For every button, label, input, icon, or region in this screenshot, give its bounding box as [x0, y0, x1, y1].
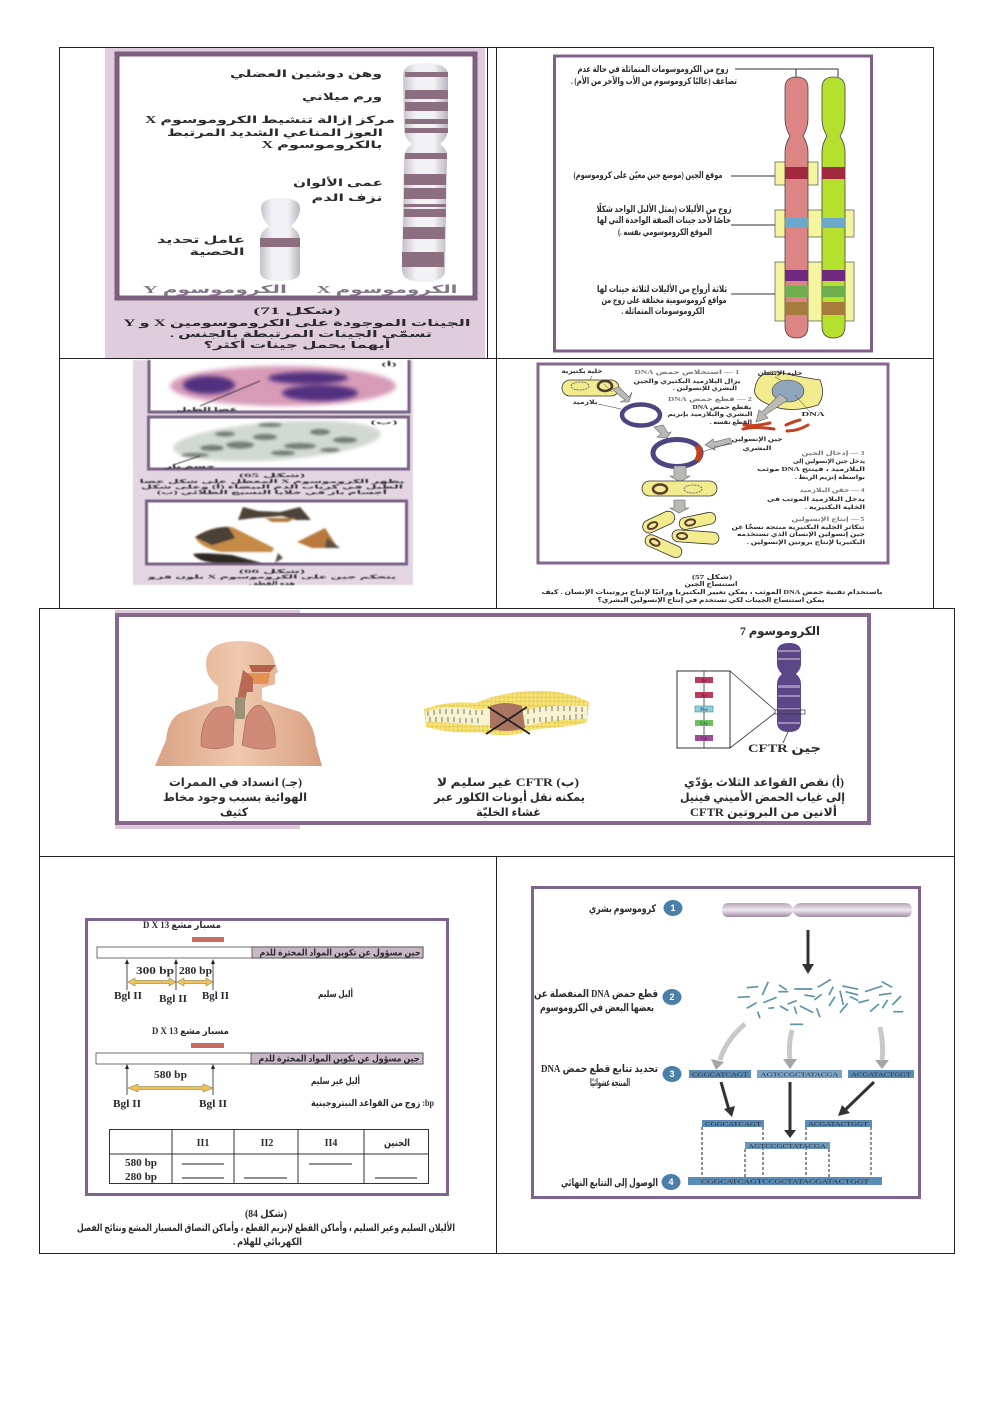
amino acid callout: Ile — [701, 694, 707, 699]
X chromosome gene labels: نزف الدم — [312, 193, 382, 204]
gel results table: II4 — [325, 1138, 337, 1149]
caption figure 66 — [146, 568, 396, 587]
dividing bacteria — [641, 509, 719, 560]
cloning steps: يقطع حمض DNA — [692, 404, 752, 411]
X chromosome gene labels: وهن دوشين العضلي — [230, 69, 382, 80]
amino acid callout: Val — [701, 737, 708, 742]
CFTR gene label: جين CFTR — [748, 741, 821, 755]
chromosome labels: ثلاثة أزواج من الأليلات لثلاثة جينات لها — [597, 283, 727, 295]
bacterium with recombinant plasmid — [642, 481, 717, 496]
abnormal allele diagram: Bgl II — [113, 1099, 141, 1110]
step labels: كروموسوم بشري — [589, 904, 657, 915]
CFTR gene label — [748, 732, 821, 755]
gel results table: II1 — [197, 1138, 209, 1149]
chromosome labels: الموقع الكروموسومي نفسه .) — [618, 227, 712, 238]
yellow gene boxes — [775, 162, 854, 321]
normal allele diagram: أليل سليم — [318, 987, 353, 1000]
caption figure 71: تسمّى الجينات المرتبطة بالجنس . — [170, 330, 432, 340]
normal allele diagram: Bgl II — [114, 991, 142, 1002]
chromosome labels: موقع الجين (موضع جين معيّن على كروموسوم) — [574, 170, 722, 181]
caption figure 71: (شكل 71) — [254, 306, 340, 317]
caption figure 66: يتحكم جين على الكروموسوم X بلون فرو — [146, 574, 396, 580]
diagram labels: خلية بكتيرية — [562, 368, 602, 375]
cloning steps: بواسطة إنزيم الربط . — [795, 474, 865, 481]
diagram labels — [562, 368, 825, 452]
cloning steps: تتكاثر الخلية البكتيرية منتجة نسخًا عن — [732, 523, 864, 531]
diagram labels: جين الإنسولين — [732, 436, 782, 443]
chromosome names: الكروموسوم X — [317, 284, 458, 296]
X chromosome gene labels: عمى الألوان — [293, 176, 383, 189]
step numbers — [668, 903, 676, 1187]
caption figure 84: الأليلان السليم وغير السليم ، وأماكن القطع لإنزيم القطع ، وأماكن التصاق المسبار المشع ونتائج الفصل — [77, 1221, 455, 1234]
aligned fragments — [688, 1120, 882, 1186]
caption figure 71: الجينات الموجودة على الكروموسومين X و Y — [124, 318, 471, 329]
chromosome Y — [260, 198, 300, 281]
box B: Barr body: جسم بار — [163, 464, 215, 470]
gel results table: II2 — [261, 1138, 273, 1149]
panel: Barr body and calico cat — [133, 360, 413, 587]
caption figure 71 — [124, 306, 471, 351]
cloning steps: جين إنسولين الإنسان الذي تستخدمه — [737, 531, 865, 538]
normal allele diagram: Bgl II — [159, 994, 187, 1005]
caption figure 57: يمكن استنساخ الجينات لكي تستخدم في إنتاج الإنسولين البشري؟ — [598, 597, 824, 604]
X chromosome gene labels: مركز إزالة تنشيط الكروموسوم X — [145, 115, 395, 126]
leader lines — [731, 69, 838, 294]
caption figure 57: باستخدام تقنية حمض DNA الموثب ، يمكن تغيير البكتيريا وراثيًا لإنتاج بروتينات الإنسان . كيف — [542, 589, 882, 596]
caption figure 66: (شكل 66) — [239, 568, 306, 575]
sequenced fragments — [689, 1070, 914, 1078]
amino acid callout: Gly — [700, 722, 708, 727]
X chromosome gene labels — [145, 69, 395, 258]
step labels: قطع حمض DNA المنفصلة عن — [534, 989, 658, 1000]
table grid — [39, 47, 955, 1254]
cloning steps: يدخل جين الإنسولين إلى — [793, 458, 865, 465]
panel: cystic fibrosis CFTR — [115, 610, 869, 829]
normal allele diagram: 300 bp — [136, 966, 174, 977]
aligned fragments: CGGCATCAGT — [705, 1122, 761, 1128]
panel: homologous chromosomes and alleles — [554, 56, 872, 351]
caption figure 57: استنساخ الجين — [684, 581, 738, 588]
gel results table: 280 bp — [125, 1172, 157, 1183]
caption figure 57 — [542, 574, 882, 604]
step numbers: 4 — [668, 1177, 674, 1187]
pink chromosome — [785, 77, 808, 338]
caption figure 84 — [77, 1209, 455, 1248]
cloning steps: البشري والبلازميد بإنزيم — [668, 411, 752, 418]
gray process arrows — [612, 387, 788, 513]
cloning steps: الخلية البكتيرية . — [805, 504, 865, 511]
chromosome X — [402, 63, 448, 282]
caption figure 65 — [139, 472, 405, 496]
caption figure 66: هذه القطة . — [249, 581, 296, 587]
abnormal allele diagram: مسبار مشع D X 13 — [152, 1026, 229, 1037]
abnormal allele diagram: bp: زوج من القواعد النيتروجينية — [311, 1099, 434, 1109]
chromosome 7 — [775, 643, 805, 732]
chromosome labels: تضاعف (غالبًا كروموسوم من الأب والآخر من الأم) . — [571, 75, 737, 87]
normal allele diagram: 280 bp — [179, 966, 212, 977]
abnormal allele diagram: أليل غير سليم — [311, 1074, 360, 1087]
step labels: تحديد تتابع قطع حمض DNA — [541, 1064, 658, 1075]
amino acid callout: Ile — [701, 679, 707, 684]
caption figure 84: (شكل 84) — [245, 1209, 287, 1220]
chromosome labels — [571, 64, 737, 317]
captions a, b, c: (أ) نقص القواعد الثلاث يؤدّي — [684, 774, 844, 790]
panel: shotgun DNA sequencing — [532, 888, 920, 1198]
abnormal allele diagram: جين مسؤول عن تكوين المواد المخثرة للدم — [258, 1054, 420, 1064]
red gene fragments — [743, 420, 808, 431]
leader lines — [590, 376, 810, 452]
X chromosome gene labels: عامل تحديد — [157, 235, 245, 246]
bacterial cell with plasmid — [562, 380, 619, 396]
cloning steps: 3 — إدخال الجين — [802, 450, 864, 457]
step numbers: 1 — [670, 903, 676, 913]
step labels: بعضها البعض في الكروموسوم — [540, 1003, 654, 1014]
caption figure 65: (شكل 65) — [239, 472, 306, 479]
captions a, b, c: إلى غياب الحمض الأميني فينيل — [680, 790, 845, 804]
human cell — [755, 372, 823, 410]
gel results table: الجنين — [384, 1138, 410, 1149]
box A: drumstick: عصا الطبل — [176, 407, 238, 413]
captions a, b, c: كثيف — [220, 807, 248, 819]
sequenced fragments: AGTCCGCTATACGA — [760, 1072, 839, 1078]
abnormal allele diagram: Bgl II — [199, 1099, 227, 1110]
amino acid callout: Phe — [700, 708, 709, 713]
sequenced fragments: ACGATACTGGT — [851, 1072, 911, 1078]
chromosome labels: الكروموسومات المتماثلة . — [622, 306, 704, 317]
DNA fragments — [738, 979, 903, 1024]
gel results table: 580 bp — [125, 1158, 157, 1169]
captions a, b, c: غشاء الخليّة — [476, 807, 541, 819]
chromosome labels: خاصًا لأحد جينات الصفة الواحدة التي لها — [597, 214, 731, 226]
X chromosome gene labels: ورم ميلاني — [302, 92, 382, 103]
chromosome labels: زوج من الكروموسومات المتماثلة في حالة عدم — [578, 64, 728, 75]
box A: drumstick: (أ) — [382, 360, 397, 368]
chromosome names — [143, 284, 458, 296]
aligned fragments: ACGATACTGGT — [808, 1122, 868, 1128]
chromosome labels: زوج من الأليلات (يمثل الأليل الواحد شكلًا — [596, 202, 732, 215]
abnormal allele diagram — [96, 1026, 434, 1110]
step labels — [534, 904, 658, 1189]
normal allele diagram: جين مسؤول عن تكوين المواد المخثرة للدم — [260, 948, 420, 958]
cloning steps: 4 — حقن البلازميد — [800, 487, 864, 494]
captions a, b, c: (جـ) انسداد في الممرات — [169, 777, 302, 789]
chromosome labels: مواقع كروموسومية مختلفة على زوج من — [602, 295, 726, 306]
caption figure 65: يظهر الكروموسوم X المعطل على شكل عصا — [139, 479, 405, 485]
cloning steps: القطع نفسه . — [710, 419, 752, 426]
box B: Barr body — [148, 415, 408, 470]
human respiratory system — [155, 641, 322, 766]
cloning steps: يزال البلازميد البكتيري والجين — [634, 378, 740, 385]
cloning steps: البشري للإنسولين . — [673, 385, 737, 392]
cloning steps: البكتيريا لإنتاج بروتين الإنسولين . — [747, 539, 865, 546]
abnormal allele diagram: 580 bp — [154, 1070, 187, 1081]
diagram labels: خلية الإنسان — [758, 370, 802, 377]
diagram labels: بلازميد — [572, 399, 598, 406]
step number badges — [662, 900, 682, 1190]
captions a, b, c: الهوائية بسبب وجود مخاط — [163, 792, 307, 805]
caption figure 65: أجسام بار في خلايا النسيج الطلائي (ب) — [157, 489, 387, 496]
X chromosome gene labels: بالكروموسوم X — [262, 140, 382, 151]
aligned fragments: AGTCCGCTATACGA — [748, 1144, 827, 1150]
captions a, b, c: ألانين من البروتين CFTR — [690, 804, 837, 820]
human chromosome — [722, 903, 912, 917]
panel: gene cloning figure 57 — [538, 364, 888, 604]
gray curved arrows — [711, 1024, 889, 1070]
sequenced fragments: CGGCATCAGT — [692, 1072, 748, 1078]
caption figure 65: الطبل في كريات الدم البيضاء (أ) وعلى شكل — [141, 484, 404, 490]
step labels: المنتجة عشوائيًا — [590, 1078, 630, 1089]
caption figure 71: أيهما يحمل جينات أكثر؟ — [204, 338, 390, 351]
captions a, b, c: (ب) CFTR غير سليم لا — [437, 777, 579, 789]
plasmid rings — [622, 404, 701, 466]
normal allele diagram: مسبار مشع D X 13 — [143, 920, 221, 931]
chromosome names: الكروموسوم Y — [143, 284, 287, 296]
cloning steps: 2 — قطع حمض DNA — [668, 396, 752, 403]
box B: Barr body: (ب) — [370, 419, 398, 426]
caption figure 84: الكهربائي للهلام . — [233, 1237, 302, 1248]
alignment dashed lines — [702, 1127, 871, 1177]
panel: normal and abnormal allele figure 84 — [77, 920, 455, 1248]
arrow: chromosome to fragments — [802, 930, 814, 974]
cloning steps — [634, 369, 865, 546]
cloning steps: 1 — استخلاص حمض DNA — [634, 369, 740, 376]
box A: drumstick — [149, 360, 409, 413]
gel results table — [109, 1129, 429, 1184]
panel: X and Y chromosome genes — [105, 48, 485, 358]
normal allele diagram: Bgl II — [202, 991, 229, 1002]
step numbers: 2 — [669, 992, 675, 1002]
normal allele diagram — [97, 920, 423, 1005]
cloning steps: يدخل البلازميد الموثب في — [767, 496, 865, 503]
box C: calico cat — [146, 501, 406, 564]
cloning steps: 5 — إنتاج الإنسولين — [792, 516, 864, 523]
cloning steps: البلازميد ، فينتج DNA موثب — [757, 466, 865, 473]
membrane — [424, 691, 589, 735]
green chromosome — [822, 77, 845, 338]
amino acid callout — [677, 671, 775, 748]
diagram labels: DNA — [802, 411, 825, 418]
captions a, b, c: يمكنه نقل أيونات الكلور عبر — [433, 789, 585, 805]
chromosome 7 title: الكروموسوم 7 — [740, 624, 820, 639]
aligned fragments: CGGCATCAGTCCGCTATACGATACTGGT — [701, 1180, 869, 1186]
caption figure 57: (شكل 57) — [692, 574, 732, 581]
X chromosome gene labels: الخصية — [190, 247, 244, 258]
X chromosome gene labels: العوز المناعي الشديد المرتبط — [167, 128, 383, 139]
step labels: الوصول إلى التتابع النهائي — [561, 1178, 658, 1189]
step numbers: 3 — [669, 1069, 675, 1079]
captions a, b, c — [163, 774, 845, 820]
diagram labels: البشري — [742, 445, 772, 452]
dark arrows to alignment — [721, 1082, 874, 1138]
